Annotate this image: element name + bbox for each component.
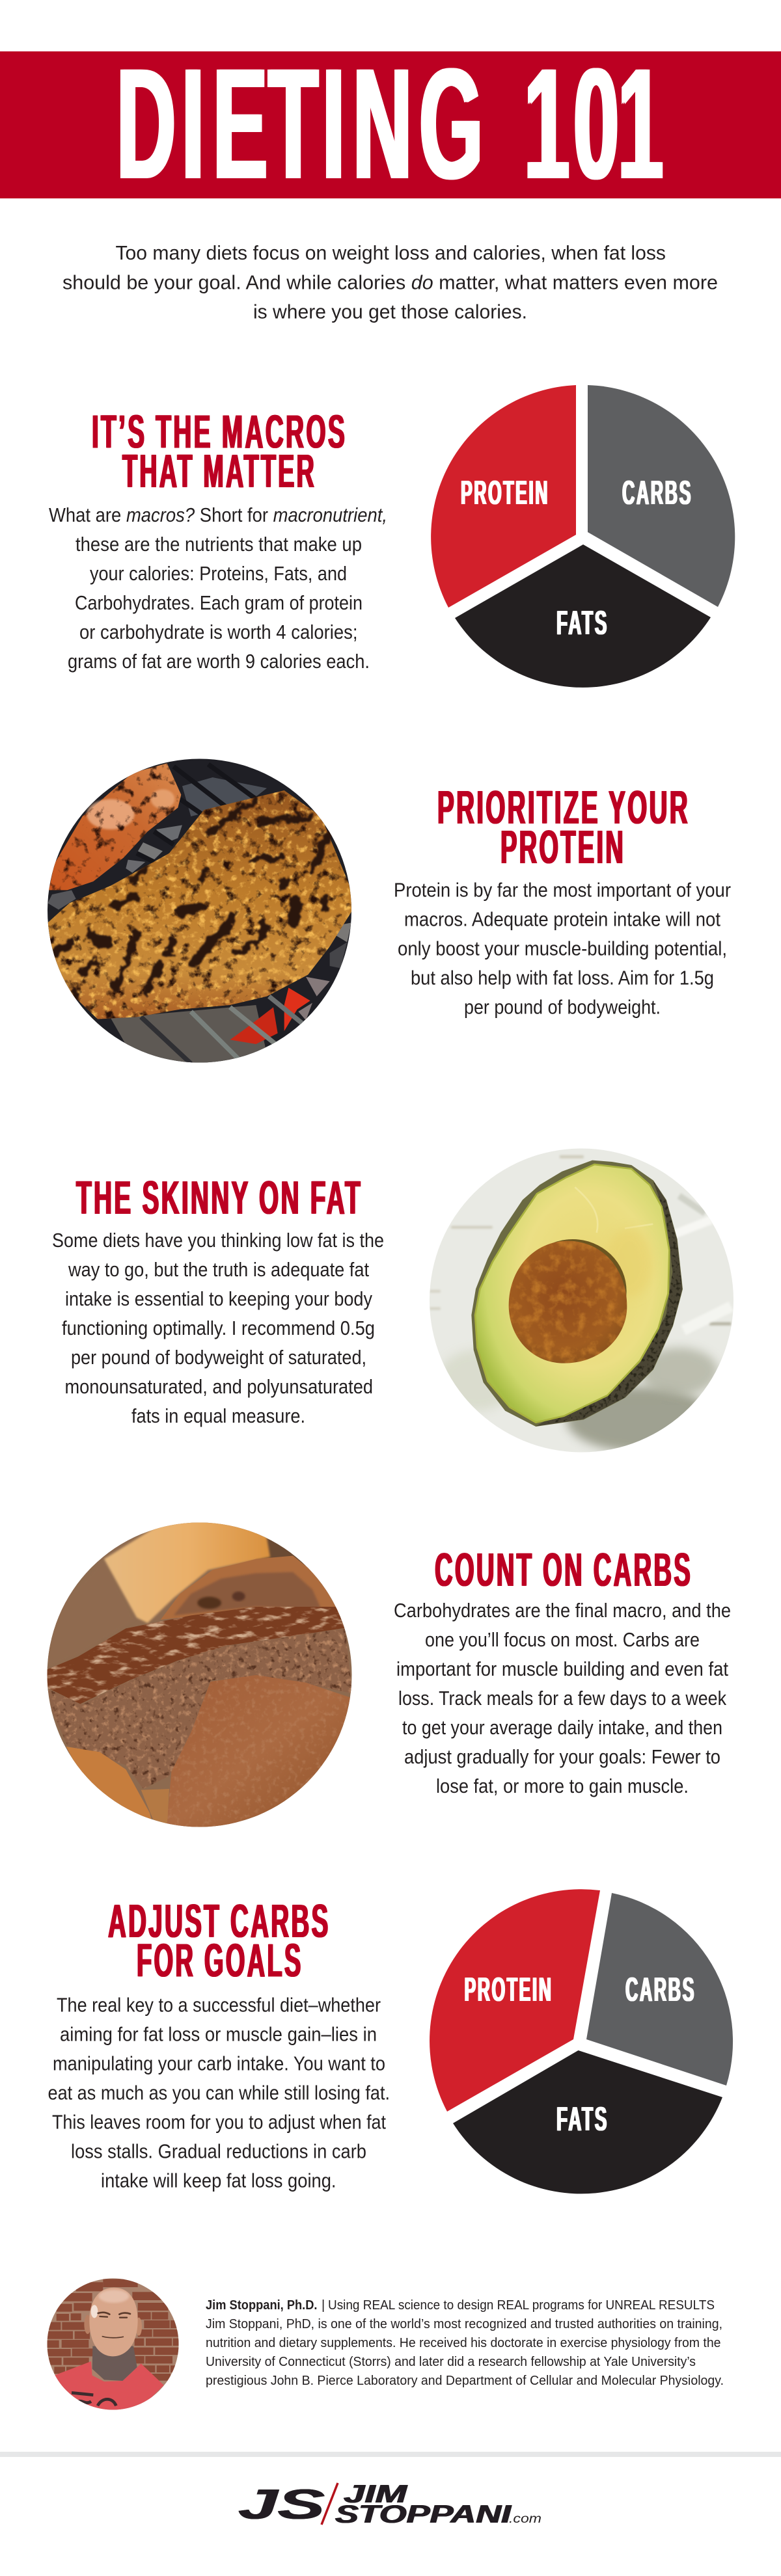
- text: protein: Protein is by far the most important of your: [394, 879, 731, 902]
- avocado skin: [472, 1161, 682, 1426]
- text: macros: What are macros? Short for macronutrient,: [49, 504, 387, 526]
- author bio: [206, 2298, 724, 2388]
- baguette: [104, 1514, 270, 1623]
- pie chart: macros: PROTEIN: [461, 474, 549, 512]
- text: fat: Some diets have you thinking low fat is the: [52, 1229, 384, 1252]
- heading: fat: THE SKINNY ON FAT: [76, 1172, 363, 1224]
- text: protein: macros. Adequate protein intake will not: [404, 908, 720, 930]
- author bio: University of Connecticut (Storrs) and later did a research fellowship at Yale University’s: [206, 2355, 696, 2369]
- pie chart: adjust carbs: [430, 1889, 733, 2194]
- text: macros: your calories: Proteins, Fats, and: [90, 563, 347, 585]
- text: macros: grams of fat are worth 9 calories each.: [68, 651, 370, 673]
- avocado pit: [509, 1239, 627, 1363]
- text: macros: or carbohydrate is worth 4 calories;: [79, 621, 358, 643]
- heading: adjust carbs: ADJUST CARBS: [108, 1896, 331, 1948]
- heading: adjust carbs: FOR GOALS: [137, 1935, 303, 1987]
- main chicken breast: [48, 790, 351, 1019]
- intro text: should be your goal. And while calories do matter, what matters even more: [62, 272, 718, 294]
- text: macros: Carbohydrates. Each gram of protein: [75, 592, 363, 614]
- panel: fat: [52, 1142, 747, 1465]
- pie chart: macros: CARBS: [622, 474, 692, 512]
- text: fat: fats in equal measure.: [131, 1405, 305, 1427]
- face details: [98, 2313, 130, 2338]
- text: adjust carbs: eat as much as you can while still losing fat.: [48, 2082, 390, 2104]
- text: macros: [49, 504, 387, 673]
- text: macros: these are the nutrients that make up: [75, 533, 362, 556]
- loaf crust: [47, 1607, 345, 1704]
- pie chart: adjust carbs: FATS: [556, 2100, 609, 2138]
- intro text: Too many diets focus on weight loss and calories, when fat loss: [116, 242, 666, 264]
- logo: JS Jim Stoppani: JS: [238, 2480, 325, 2528]
- photo: author portrait: [47, 2278, 178, 2409]
- author bio: nutrition and dietary supplements. He received his doctorate in exercise physiology from the: [206, 2336, 721, 2350]
- text: protein: only boost your muscle-building potential,: [398, 938, 727, 960]
- text: carbs: loss. Track meals for a few days to a week: [398, 1687, 727, 1710]
- shirt: [54, 2361, 164, 2415]
- neck: [92, 2346, 137, 2381]
- heading: protein: [437, 782, 690, 874]
- pie chart: adjust carbs: PROTEIN: [465, 1971, 553, 2009]
- author bio: Jim Stoppani, PhD, is one of the world’s most recognized and trusted authorities on training,: [206, 2317, 722, 2331]
- text: carbs: lose fat, or more to gain muscle.: [436, 1775, 689, 1797]
- text: protein: [394, 879, 731, 1019]
- heading: macros: [92, 406, 347, 498]
- photo: avocado: [430, 1149, 733, 1452]
- heading: macros: IT’S THE MACROS: [92, 406, 347, 458]
- photo: bread: [47, 1522, 351, 1827]
- photo: grilled chicken: [48, 758, 351, 1063]
- round slice: [161, 1556, 340, 1620]
- text: fat: way to go, but the truth is adequate fat: [68, 1259, 369, 1281]
- text: adjust carbs: intake will keep fat loss going.: [101, 2170, 336, 2192]
- left chicken piece: [49, 763, 181, 890]
- text: adjust carbs: This leaves room for you to adjust when fat: [52, 2112, 386, 2134]
- text: adjust carbs: loss stalls. Gradual reductions in carb: [71, 2140, 366, 2162]
- loaf crumb: [48, 1628, 353, 1789]
- pie chart: adjust carbs: CARBS: [625, 1971, 696, 2009]
- bottom slice: [166, 1675, 351, 1830]
- author bio: |: [322, 2298, 325, 2313]
- text: protein: but also help with fat loss. Aim for 1.5g: [411, 967, 714, 989]
- small baguette: [66, 1747, 152, 1821]
- logo: JS Jim Stoppani: .com: [509, 2512, 541, 2526]
- intro text: [62, 242, 718, 323]
- text: adjust carbs: [48, 1994, 390, 2192]
- text: adjust carbs: The real key to a successful diet–whether: [57, 1994, 381, 2017]
- heading: macros: THAT MATTER: [122, 446, 316, 498]
- heading: adjust carbs: [108, 1896, 331, 1987]
- author bio: Jim Stoppani, Ph.D.: [206, 2298, 318, 2313]
- text: adjust carbs: aiming for fat loss or muscle gain–lies in: [60, 2023, 377, 2045]
- text: fat: per pound of bodyweight of saturated,: [71, 1347, 366, 1369]
- title banner: [0, 36, 781, 213]
- text: fat: [52, 1229, 384, 1427]
- intro text: is where you get those calories.: [253, 301, 527, 323]
- logo: JS Jim Stoppani: [238, 2480, 541, 2529]
- text: adjust carbs: manipulating your carb intake. You want to: [53, 2053, 385, 2075]
- panel: carbs: [39, 1514, 731, 1839]
- avocado flesh: [475, 1164, 669, 1423]
- text: protein: per pound of bodyweight.: [464, 997, 661, 1019]
- panel: author: [47, 2278, 722, 2409]
- logo: JS Jim Stoppani: STOPPANI: [335, 2501, 512, 2529]
- panel: adjust carbs: [48, 1889, 733, 2194]
- heading: protein: PROTEIN: [500, 822, 625, 874]
- text: fat: monounsaturated, and polyunsaturated: [65, 1376, 373, 1398]
- text: carbs: to get your average daily intake, and then: [402, 1717, 722, 1739]
- panel: macros: [49, 385, 735, 688]
- pie chart: macros: [431, 385, 735, 688]
- head: [89, 2288, 138, 2356]
- text: carbs: [394, 1600, 731, 1797]
- author bio: prestigious John B. Pierce Laboratory and Department of Cellular and Molecular Physiology.: [206, 2374, 724, 2388]
- pie chart: macros: FATS: [556, 604, 609, 642]
- text: carbs: important for muscle building and even fat: [396, 1658, 728, 1680]
- text: fat: intake is essential to keeping your body: [65, 1288, 373, 1310]
- text: carbs: adjust gradually for your goals: Fewer to: [404, 1746, 720, 1768]
- author bio: Using REAL science to design REAL programs for UNREAL RESULTS: [328, 2298, 715, 2313]
- text: fat: functioning optimally. I recommend 0.5g: [62, 1317, 375, 1339]
- title: DIETING 101: [116, 36, 663, 213]
- text: carbs: Carbohydrates are the final macro, and the: [394, 1600, 731, 1622]
- text: carbs: one you’ll focus on most. Carbs are: [425, 1629, 700, 1651]
- ears: [84, 2314, 90, 2334]
- panel: protein: [39, 751, 731, 1075]
- logo: JS Jim Stoppani: JIM: [344, 2480, 408, 2508]
